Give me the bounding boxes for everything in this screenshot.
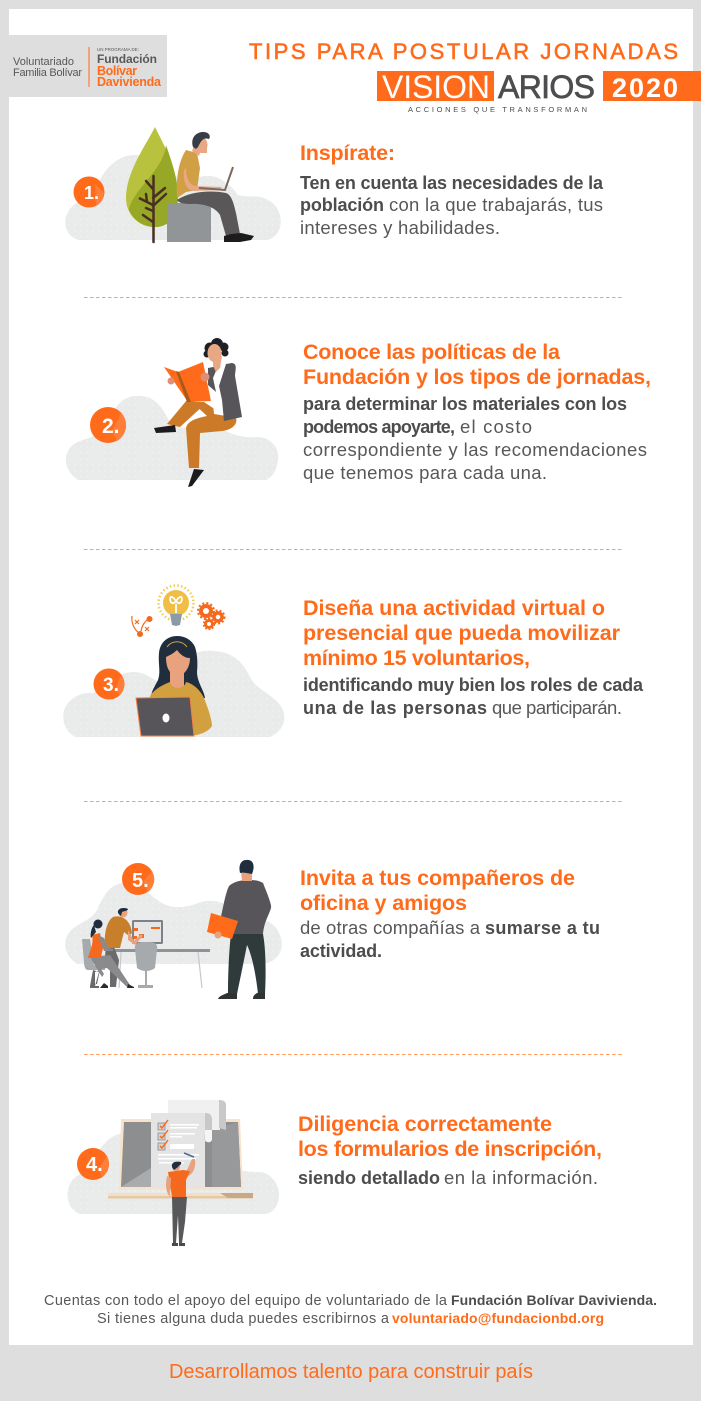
text block: step 5: oficina y amigos	[300, 891, 467, 915]
number badge 3	[94, 668, 124, 700]
text block: step 5: actividad.	[300, 941, 382, 961]
campaign logo: Visionarios 2020: ACCIONES QUE TRANSFORMAN	[408, 105, 587, 114]
illustration: woman with laptop and ideas	[63, 586, 284, 737]
text block: step 2: podemos apoyarte,	[303, 417, 455, 437]
text block: step 5: de otras compañías a	[300, 917, 481, 938]
panel: step 5	[65, 860, 600, 999]
text block: step 2	[303, 340, 651, 483]
logo: Voluntariado Familia Bolívar / Fundación Bolívar Davivienda: Voluntariado	[13, 56, 74, 68]
text block: step 4: en la información.	[444, 1167, 598, 1188]
number badge 1: 1.	[84, 183, 99, 203]
number badge 2: 2.	[102, 415, 120, 438]
text block: step 5: sumarse a tu	[485, 918, 600, 938]
illustration: person reading book on cloud	[66, 338, 278, 487]
number badge 5	[122, 863, 154, 895]
divider 3	[84, 800, 623, 802]
text block: step 2: Fundación y los tipos de jornadas,	[303, 365, 651, 389]
footer slogan: Desarrollamos talento para construir país	[169, 1361, 533, 1383]
panel: step 3	[63, 586, 644, 737]
campaign logo: Visionarios 2020	[377, 69, 701, 114]
text block: step 4: los formularios de inscripción,	[298, 1137, 602, 1161]
text block: step 3: identificando muy bien los roles de cada	[303, 675, 644, 695]
divider 4	[84, 1054, 623, 1056]
logo: Voluntariado Familia Bolívar / Fundación Bolívar Davivienda: Bolívar	[97, 64, 137, 78]
text block: step 2: Conoce las políticas de la	[303, 340, 561, 364]
text block: step 1	[300, 141, 604, 238]
panel: step 2	[66, 338, 651, 487]
text block: step 1: intereses y habilidades.	[300, 217, 500, 238]
campaign logo: Visionarios 2020: ARIOS	[498, 69, 595, 105]
logo: Voluntariado Familia Bolívar / Fundación Bolívar Davivienda: Familia Bolívar	[13, 67, 82, 79]
logo: Voluntariado Familia Bolívar / Fundación Bolívar Davivienda: Fundación	[97, 52, 157, 66]
illustration: person filling form on giant laptop	[68, 1100, 279, 1246]
panel: step 4	[68, 1100, 602, 1246]
illustration: person with laptop beside tree	[65, 127, 281, 242]
text block: step 3: una de las personas	[303, 698, 487, 718]
text block: step 5	[300, 866, 600, 961]
campaign logo: Visionarios 2020: VISION	[382, 69, 490, 105]
text block: step 2: para determinar los materiales con los	[303, 394, 627, 414]
text block: step 5: Invita a tus compañeros de	[300, 866, 575, 890]
closing note	[44, 1292, 657, 1327]
text block: step 3	[303, 596, 644, 718]
text block: step 1: Inspírate:	[300, 141, 395, 165]
text block: step 1: población	[300, 195, 384, 215]
text block: step 3: presencial que pueda movilizar	[303, 621, 621, 645]
text block: step 3: mínimo 15 voluntarios,	[303, 646, 530, 670]
logo: Voluntariado Familia Bolívar / Fundación Bolívar Davivienda: Davivienda	[97, 75, 162, 89]
text block: step 3: que participarán.	[492, 697, 622, 718]
closing note: Si tienes alguna duda puedes escribirnos a	[97, 1311, 390, 1327]
text block: step 1: con la que trabajarás, tus	[389, 194, 603, 215]
closing note: Fundación Bolívar Davivienda.	[451, 1292, 657, 1308]
logo: Voluntariado Familia Bolívar / Fundación Bolívar Davivienda	[9, 35, 167, 97]
illustration: coworkers at desk and standing man	[65, 860, 282, 999]
text block: step 4: Diligencia correctamente	[298, 1112, 552, 1136]
closing note: Cuentas con todo el apoyo del equipo de voluntariado de la	[44, 1293, 448, 1309]
number badge 4	[77, 1148, 109, 1180]
text block: step 4	[298, 1112, 602, 1188]
text block: step 4: siendo detallado	[298, 1168, 440, 1188]
campaign logo: Visionarios 2020: 2020	[612, 73, 678, 103]
closing note: voluntariado@fundacionbd.org	[392, 1310, 604, 1326]
panel: step 1	[65, 127, 604, 242]
text block: step 3: Diseña una actividad virtual o	[303, 596, 605, 620]
text block: step 2: correspondiente y las recomendaciones	[303, 439, 647, 460]
logo: Voluntariado Familia Bolívar / Fundación Bolívar Davivienda: UN PROGRAMA DE:	[97, 47, 139, 52]
text block: step 2: que tenemos para cada una.	[303, 462, 547, 483]
divider 1	[84, 296, 623, 298]
text block: step 1: Ten en cuenta las necesidades de la	[300, 173, 604, 193]
text block: step 2: el costo	[460, 416, 532, 437]
divider 2	[84, 548, 623, 550]
number badge 2	[90, 407, 126, 443]
number badge 4: 4.	[86, 1154, 103, 1176]
number badge 1	[74, 176, 104, 208]
number badge 3: 3.	[103, 675, 119, 696]
title: TIPS PARA POSTULAR JORNADAS	[249, 39, 678, 64]
number badge 5: 5.	[132, 870, 149, 892]
